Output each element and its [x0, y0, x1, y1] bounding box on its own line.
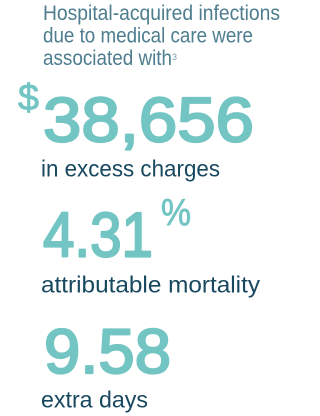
stat: 38,656 in excess charges: 38,656	[43, 86, 254, 156]
stat: 4.31% attributable mortality: %	[161, 192, 191, 234]
stat: 4.31% attributable mortality: 4.31	[43, 200, 153, 270]
heading: hospital-acquired infections: associated with	[43, 47, 172, 70]
stat: 38,656 in excess charges: in excess charges	[41, 156, 220, 182]
stat: 9.58 extra days: 9.58	[44, 317, 171, 387]
stat: 38,656 in excess charges	[18, 77, 254, 182]
heading: hospital-acquired infections: Hospital-acquired infections	[43, 2, 280, 25]
heading: hospital-acquired infections	[43, 2, 280, 70]
stat: 4.31% attributable mortality	[41, 192, 260, 298]
stat: 9.58 extra days: extra days	[41, 386, 148, 412]
heading: hospital-acquired infections: due to medical care were	[43, 24, 253, 48]
heading: hospital-acquired infections: 3	[172, 52, 177, 62]
stat: 9.58 extra days	[41, 317, 171, 412]
stat: 4.31% attributable mortality: attributable mortality	[41, 272, 260, 298]
stat: 38,656 in excess charges: $	[18, 77, 39, 118]
